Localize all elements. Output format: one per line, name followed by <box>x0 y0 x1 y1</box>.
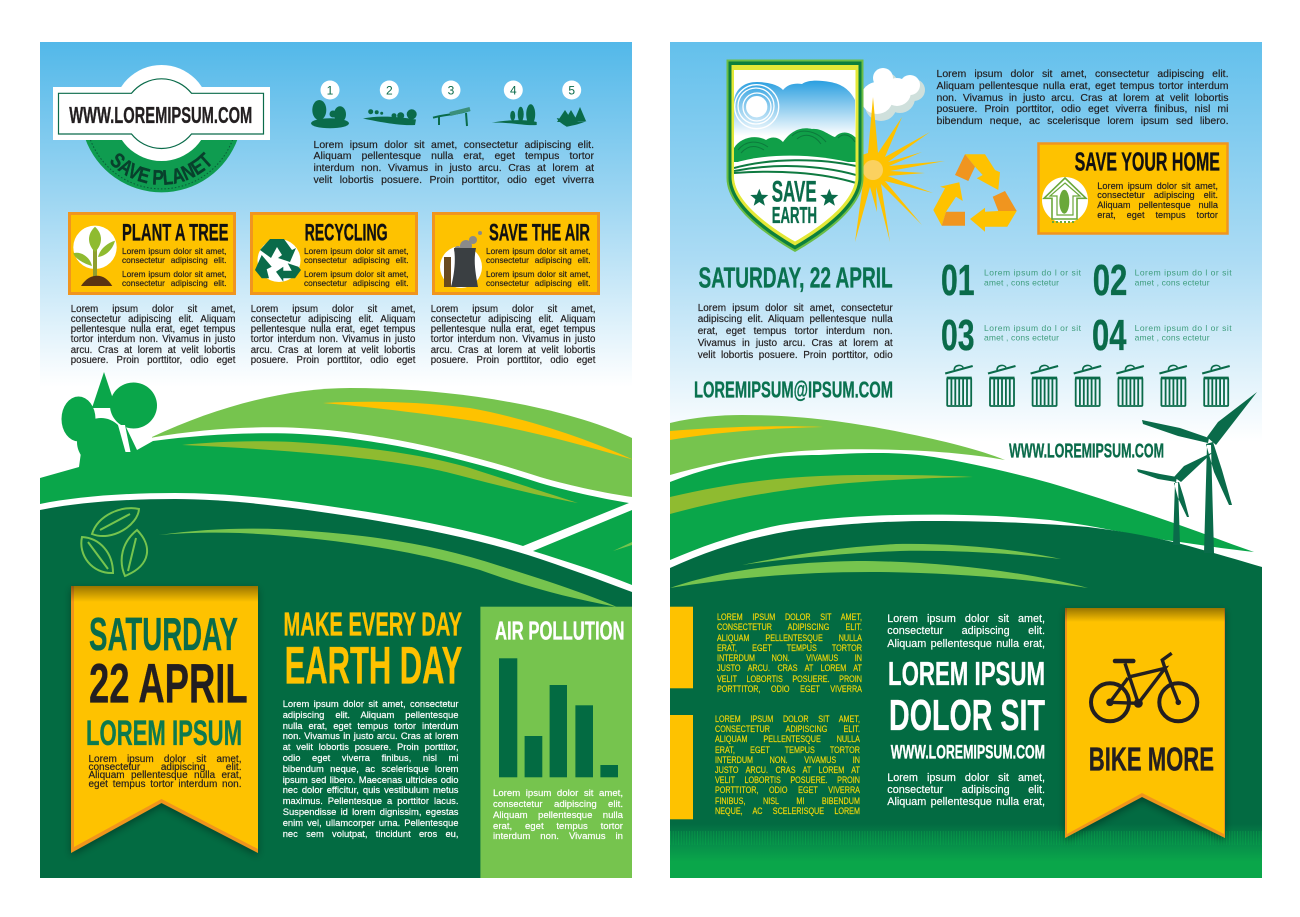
ribbon body <box>71 586 258 853</box>
heading: make every day: MAKE EVERY DAY <box>284 606 462 643</box>
card text: plant a tree: Lorem ipsum dolor sit amet, <box>122 246 226 256</box>
sun disc <box>863 160 883 180</box>
item captions <box>984 268 1232 343</box>
plate outline <box>58 79 264 148</box>
step icon: bridge <box>433 109 470 126</box>
small light streak <box>613 542 632 551</box>
paragraph: column 2: tortor interdum non. Vivamus in justo <box>251 334 415 345</box>
white bump <box>114 65 210 161</box>
yellow text block 1: PORTTITOR, ODIO EGET VIVERRA <box>716 684 861 694</box>
website: WWW.LOREMIPSUM.COM <box>1009 440 1164 462</box>
bar 4 <box>575 705 593 777</box>
earth day paragraph: nulla erat, eget tempus tortor interdum <box>283 720 458 731</box>
item captions: Lorem ipsum do l or sit <box>1135 268 1232 278</box>
card frame <box>434 214 598 294</box>
paragraph: column 2: pellentesque nulla erat, eget tempus <box>251 324 415 335</box>
paragraph: column 3: arcu. Cras at lorem at velit lobortis <box>431 344 595 356</box>
yellow text block 2: VELIT LOBORTIS POSUERE. PROIN <box>715 775 860 785</box>
light streak upper <box>742 544 1061 565</box>
card text: plant a tree: Lorem ipsum dolor sit amet, <box>122 269 226 279</box>
card text: save your home: Aliquam pellentesque nulla <box>1097 200 1218 210</box>
shield hills <box>734 128 856 162</box>
card frame <box>70 214 234 294</box>
right intro paragraph: Lorem ipsum dolor sit amet, consectetur adipiscing elit. <box>936 68 1228 80</box>
bar 3 <box>550 685 567 777</box>
card text: plant a tree <box>122 246 226 288</box>
white plate <box>53 87 270 140</box>
card text: recycling <box>304 246 408 288</box>
white hill outline <box>152 427 632 520</box>
numbered list <box>941 256 1232 360</box>
ribbon text: Aliquam pellentesque nulla erat, <box>88 770 242 781</box>
white field <box>734 156 856 240</box>
white text lower: consectetur adipiscing elit. <box>887 784 1045 796</box>
card frame <box>252 214 416 294</box>
number 04: 04 <box>1092 311 1127 360</box>
light streak lower <box>670 561 1088 588</box>
label: bike more: BIKE MORE <box>1089 742 1214 779</box>
ribbon text: consectetur adipiscing elit. <box>88 762 242 773</box>
green disc <box>85 138 238 192</box>
air pollution paragraph: consectetur adipiscing elit. <box>493 799 623 810</box>
ribbon: bike more <box>1065 608 1225 838</box>
item captions: amet , cons ectetur <box>984 278 1059 288</box>
icon: seedling <box>73 226 117 286</box>
card text: save your home: Lorem ipsum dolor sit amet, <box>1097 180 1218 190</box>
ribbon text <box>88 754 242 790</box>
card text: save your home <box>1097 180 1218 220</box>
paragraph: column 1: consectetur adipiscing elit. Aliquam <box>71 314 235 325</box>
mid green field <box>40 425 629 546</box>
text: intro paragraph <box>313 138 594 186</box>
bar 2 <box>525 736 542 777</box>
heading: lorem ipsum: LOREM IPSUM <box>888 656 1045 693</box>
yellow tab lower <box>670 715 693 819</box>
step circles <box>320 80 581 100</box>
paragraph: column 2 <box>250 304 416 366</box>
white text upper: consectetur adipiscing elit. <box>887 625 1045 637</box>
paragraph: column 3: tortor interdum non. Vivamus in justo <box>431 334 595 345</box>
ribbon heading: LOREM IPSUM <box>86 714 242 753</box>
paragraph: column 1: arcu. Cras at lorem at velit lobortis <box>71 344 235 356</box>
step numbers: 1 <box>327 84 334 98</box>
step numbers: 2 <box>386 84 393 98</box>
step icon: field <box>363 109 417 125</box>
heading: earth day: EARTH DAY <box>285 636 462 695</box>
field lines <box>734 160 856 183</box>
panel: right poster <box>670 42 1262 878</box>
yellow text block 2 <box>714 714 860 816</box>
yellow text block 2: PORTTITOR, ODIO EGET VIVERRA <box>715 785 860 795</box>
step numbers <box>327 84 575 98</box>
icon: three leaves <box>81 508 147 576</box>
dark green ground <box>40 499 632 878</box>
right intro paragraph: Aliquam pellentesque nulla erat, eget tempus tortor interdum <box>936 80 1228 92</box>
ribbon text: eget tempus tortor interdum non. <box>88 779 242 790</box>
right arrow tail <box>993 191 1017 211</box>
date paragraph <box>698 303 893 361</box>
air pollution paragraph: erat, eget tempus tortor <box>493 821 623 832</box>
earth day paragraph: ipsum sed libero. Maecenas ultricies odio <box>283 774 458 785</box>
ribbon: date <box>71 586 258 853</box>
yellow text block 1: ERAT, EGET TEMPUS TORTOR <box>716 643 861 653</box>
sky background <box>40 42 632 387</box>
text: intro paragraph: velit lobortis posuere. Proin porttitor, odio eget viverra <box>314 174 594 186</box>
light green streak <box>159 529 617 607</box>
paragraph: column 3: consectetur adipiscing elit. Aliquam <box>431 314 595 325</box>
light hill <box>670 415 1005 475</box>
title: SAVE THE AIR <box>489 220 590 247</box>
item captions: amet , cons ectetur <box>1135 333 1210 343</box>
paragraph: column 3: posuere. Proin porttitor, odio eget <box>431 355 595 366</box>
icon: recycling symbol <box>255 239 301 282</box>
air pollution paragraph <box>492 788 624 842</box>
ribbon top shadow <box>71 586 258 602</box>
heading: dolor sit: DOLOR SIT <box>889 691 1045 740</box>
save planet label: SAVE PLANET <box>110 152 211 185</box>
number 03: 03 <box>941 311 975 360</box>
paragraph: column 2: consectetur adipiscing elit. Aliquam <box>251 314 415 325</box>
earth day paragraph: nec sem volutpat, tincidunt eros eu, <box>283 828 458 839</box>
sun core <box>857 154 889 186</box>
item captions: Lorem ipsum do l or sit <box>984 268 1082 278</box>
website white: WWW.LOREMIPSUM.COM <box>891 742 1045 764</box>
item captions: amet , cons ectetur <box>1135 278 1210 288</box>
earth day paragraph: non. Vivamus in justo arcu. Cras at lorem <box>283 730 458 741</box>
yellow tab upper <box>670 607 693 688</box>
card text: save your home: consectetur adipiscing elit. <box>1097 190 1218 200</box>
light green hill <box>152 388 632 497</box>
card text: recycling: Lorem ipsum dolor sit amet, <box>304 269 408 279</box>
bar 5 <box>600 765 618 777</box>
card text: recycling: consectetur adipiscing elit. <box>304 255 408 265</box>
shield face <box>734 70 856 242</box>
paragraph: column 1: pellentesque nulla erat, eget tempus <box>71 324 235 335</box>
title: RECYCLING <box>305 220 388 247</box>
tree: cone <box>92 372 112 408</box>
url: WWW.LOREMIPSUM.COM <box>69 102 252 128</box>
white text upper <box>887 613 1045 650</box>
yellow hill streak <box>323 402 634 460</box>
date paragraph: velit lobortis posuere. Proin porttitor, odio <box>698 350 893 361</box>
card: save the air <box>434 214 598 294</box>
paragraph: column 1: posuere. Proin porttitor, odio eget <box>71 355 235 366</box>
cloud body <box>861 68 920 114</box>
sun rays <box>855 97 945 242</box>
white text lower: Lorem ipsum dolor sit amet, <box>887 772 1045 784</box>
icon: green house <box>1042 177 1088 223</box>
number 01: 01 <box>941 256 975 305</box>
earth day paragraph: nec dolor efficitur, quis vestibulum metus <box>283 784 458 795</box>
card text: save the air <box>486 246 590 288</box>
olive field streak <box>182 441 578 503</box>
yellow text block 1: LOREM IPSUM DOLOR SIT AMET, <box>716 612 861 622</box>
badge: save earth shield <box>726 60 864 252</box>
dashed ring <box>90 140 232 189</box>
ribbon top shadow <box>1065 608 1225 622</box>
curve path text <box>109 162 214 185</box>
yellow text block 1 <box>716 612 862 694</box>
card text: plant a tree: consectetur adipiscing elit. <box>122 278 226 288</box>
date paragraph: adipiscing elit. Aliquam pellentesque nulla <box>698 314 893 325</box>
olive streak <box>670 475 973 514</box>
wind turbines <box>1137 392 1257 553</box>
card text: save the air: consectetur adipiscing elit. <box>486 255 590 265</box>
earth day paragraph: enim vel, ullamcorper urna. Pellentesque <box>283 817 458 828</box>
step numbers: 4 <box>510 84 517 98</box>
yellow text block 2: ALIQUAM PELLENTESQUE NULLA <box>715 734 860 744</box>
ribbon face <box>74 586 258 849</box>
date: 22 april: 22 APRIL <box>89 651 248 714</box>
email: LOREMIPSUM@IPSUM.COM <box>694 376 893 402</box>
trees <box>62 372 157 455</box>
ribbon face <box>1067 608 1224 834</box>
paragraph: column 3: Lorem ipsum dolor sit amet, <box>431 304 595 314</box>
ribbon body <box>1065 608 1225 838</box>
panel: left poster <box>40 42 634 879</box>
paragraph: column 1 <box>70 304 236 366</box>
card text: save the air: Lorem ipsum dolor sit amet, <box>486 246 590 256</box>
save: SAVE <box>772 176 817 209</box>
sky background <box>670 42 1262 442</box>
mid green hill <box>670 453 1254 560</box>
step icon: hill trees <box>492 104 537 125</box>
paragraph: column 2: arcu. Cras at lorem at velit lobortis <box>251 344 415 356</box>
step icon: forest <box>557 107 587 127</box>
step numbers: 3 <box>448 84 455 98</box>
ribbon text: Lorem ipsum dolor sit amet, <box>88 754 242 765</box>
yellow text block 2: JUSTO ARCU. CRAS AT LOREM AT <box>715 765 860 775</box>
icon: power plant <box>440 231 482 288</box>
right intro paragraph: non. Vivamus in justo arcu. Cras at lorem at velit lobortis <box>936 92 1228 104</box>
yellow text block 2: CONSECTETUR ADIPISCING ELIT. <box>715 724 860 734</box>
air pollution paragraph: interdum non. Vivamus in <box>493 831 623 842</box>
item captions: amet , cons ectetur <box>984 333 1059 343</box>
sun <box>855 97 945 242</box>
shield rim <box>726 60 864 252</box>
turbine small <box>1137 452 1213 545</box>
left arrow <box>933 182 963 226</box>
top arrow tail <box>955 154 975 181</box>
icon: bicycle <box>1091 653 1197 721</box>
yellow streak <box>670 426 823 440</box>
hill hatching <box>738 131 855 153</box>
cloud shade <box>865 73 925 121</box>
yellow text block 1: VELIT LOBORTIS POSUERE. PROIN <box>716 674 861 684</box>
card frame <box>1038 144 1228 234</box>
item captions: Lorem ipsum do l or sit <box>984 323 1082 333</box>
grass strip <box>670 824 1262 878</box>
card text: save the air: Lorem ipsum dolor sit amet, <box>486 269 590 279</box>
date paragraph: Vivamus in justo arcu. Cras at lorem at <box>698 338 893 349</box>
earth day paragraph: maximus. Pellentesque a porttitor lacus. <box>283 795 458 806</box>
card text: plant a tree: consectetur adipiscing elit. <box>122 255 226 265</box>
lower right field <box>533 510 632 585</box>
heading: air pollution: AIR POLLUTION <box>495 615 625 645</box>
white text upper: Aliquam pellentesque nulla erat, <box>887 638 1045 650</box>
yellow text block 1: JUSTO ARCU. CRAS AT LOREM AT <box>716 663 861 673</box>
dark ground <box>670 521 1262 878</box>
date paragraph: erat, eget tempus tortor interdum non. <box>698 326 893 337</box>
shield yellow border <box>732 65 858 246</box>
text: intro paragraph: interdum non. Vivamus in justo arcu. Cras at lorem at <box>314 162 594 174</box>
title: PLANT A TREE <box>122 220 228 247</box>
date heading: SATURDAY, 22 APRIL <box>698 262 893 294</box>
yellow text block 2: NEQUE, AC SCELERISQUE LOREM <box>715 806 860 816</box>
white text upper: Lorem ipsum dolor sit amet, <box>887 613 1045 625</box>
panel: air pollution <box>480 607 632 879</box>
paragraph: column 2: posuere. Proin porttitor, odio eget <box>251 355 415 366</box>
white text lower <box>887 772 1045 808</box>
bar 1 <box>499 658 517 777</box>
date paragraph: Lorem ipsum dolor sit amet, consectetur <box>698 303 893 314</box>
earth day paragraph: adipiscing elit. Aliquam pellentesque <box>283 709 458 720</box>
shield outer <box>728 62 862 250</box>
air pollution paragraph: Aliquam pellentesque nulla <box>493 810 623 821</box>
trash cans row <box>945 365 1230 406</box>
steps row <box>311 80 587 128</box>
earth day paragraph: Suspendisse id lorem dignissim, egestas <box>283 806 458 817</box>
grass blades <box>670 831 1262 845</box>
step numbers: 5 <box>568 84 575 98</box>
shield sun rings <box>735 85 779 129</box>
paragraph: column 1: tortor interdum non. Vivamus in justo <box>71 334 235 345</box>
card: recycling <box>252 214 416 294</box>
white text lower: Aliquam pellentesque nulla erat, <box>887 796 1045 808</box>
turbine large <box>1142 392 1257 553</box>
item captions: Lorem ipsum do l or sit <box>1135 323 1232 333</box>
text: intro paragraph: Aliquam pellentesque nulla erat, eget tempus tortor <box>314 150 594 162</box>
earth day paragraph <box>283 698 458 840</box>
logo: save planet badge <box>53 65 270 192</box>
left arrow tail <box>942 212 965 226</box>
right intro paragraph: bibendum neque, ac scelerisque lorem ipsum sed libero. <box>936 115 1228 127</box>
earth: EARTH <box>772 202 817 228</box>
paragraph: column 2: Lorem ipsum dolor sit amet, <box>251 304 415 314</box>
yellow text block 2: ERAT, EGET TEMPUS TORTOR <box>715 745 860 755</box>
tree: right <box>110 382 157 428</box>
earth day paragraph: bibendum neque, ac scelerisque lorem <box>283 763 458 774</box>
yellow text block 1: INTERDUM NON. VIVAMUS IN <box>716 653 861 663</box>
tree: lower <box>77 418 119 455</box>
card text: save your home: erat, eget tempus tortor <box>1097 210 1218 220</box>
earth day paragraph: Lorem ipsum dolor sit amet, consectetur <box>283 698 458 709</box>
trunk gaps <box>118 425 130 452</box>
paragraph: column 3: pellentesque nulla erat, eget tempus <box>431 324 595 335</box>
shield sky <box>734 81 855 136</box>
text: intro paragraph: Lorem ipsum dolor sit amet, consectetur adipiscing elit. <box>314 138 594 150</box>
right intro paragraph: posuere. Proin porttitor, odio eget viverra finibus, nisl mi <box>936 103 1228 115</box>
paragraph: column 3 <box>430 304 596 366</box>
bar chart <box>499 658 618 777</box>
card text: save the air: consectetur adipiscing elit. <box>486 278 590 288</box>
yellow text block 2: FINIBUS, NISL MI BIBENDUM <box>715 796 860 806</box>
card text: recycling: consectetur adipiscing elit. <box>304 278 408 288</box>
yellow text block 2: LOREM IPSUM DOLOR SIT AMET, <box>715 714 860 724</box>
cloud <box>861 68 925 121</box>
card text: recycling: Lorem ipsum dolor sit amet, <box>304 246 408 256</box>
air pollution paragraph: Lorem ipsum dolor sit amet, <box>493 788 623 799</box>
right arrow <box>970 208 1017 232</box>
number 02: 02 <box>1093 256 1127 305</box>
top arrow <box>965 154 1000 190</box>
tree: left <box>62 396 96 442</box>
right intro paragraph <box>936 68 1228 127</box>
card: plant a tree <box>70 214 234 294</box>
card: save your home <box>1038 144 1228 234</box>
yellow text block 1: ALIQUAM PELLENTESQUE NULLA <box>716 632 861 642</box>
step icon: trees <box>311 100 349 128</box>
icon: recycle arrows <box>933 154 1017 232</box>
earth day paragraph: odio eget viverra finibus, nisl mi <box>283 752 458 763</box>
earth day paragraph: at velit lobortis posuere. Proin porttitor, <box>283 741 458 752</box>
date: saturday: SATURDAY <box>89 608 238 660</box>
stars <box>750 189 838 206</box>
paragraph: column 1: Lorem ipsum dolor sit amet, <box>71 304 235 314</box>
yellow text block 2: INTERDUM NON. VIVAMUS IN <box>715 755 860 765</box>
yellow text block 1: CONSECTETUR ADIPISCING ELIT. <box>716 622 861 632</box>
